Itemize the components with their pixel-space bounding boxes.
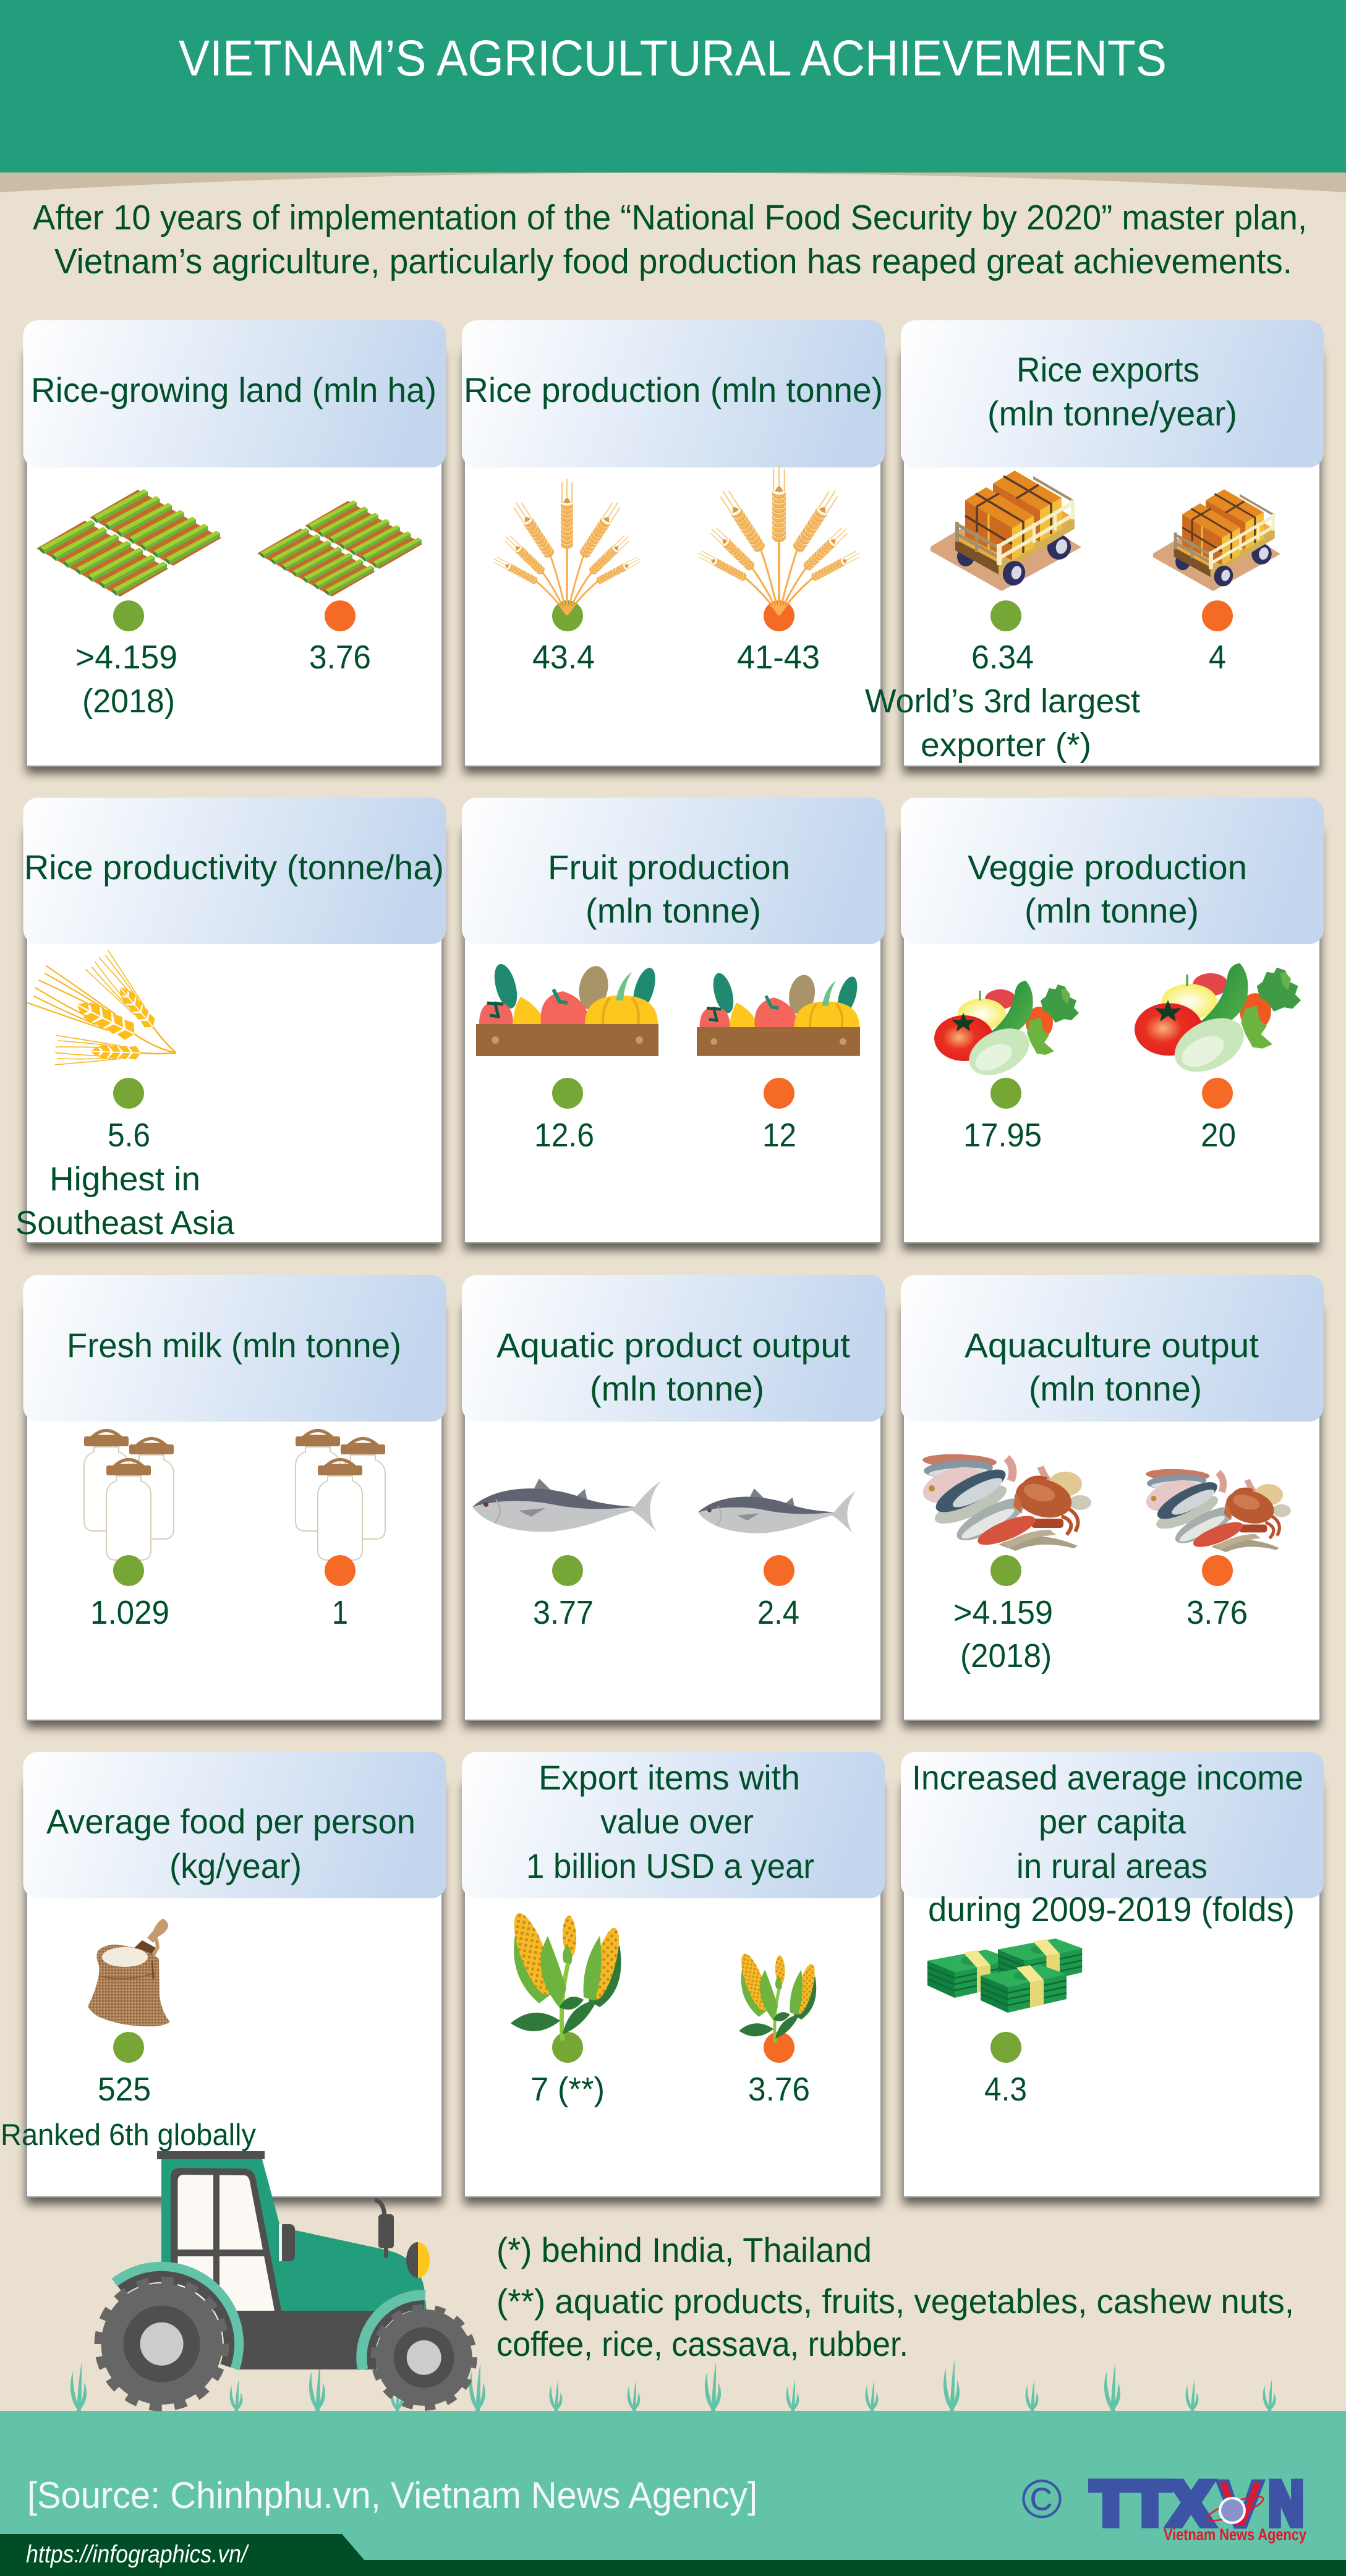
footnotes: (**) aquatic products, fruits, vegetables, cashew nuts, [496, 2282, 1294, 2321]
orange dot [764, 1555, 794, 1586]
logo: TTXVN: N [1269, 2469, 1303, 2538]
panel: aquaculture output [901, 1275, 1324, 1720]
card header [462, 798, 885, 944]
panel: fruit production [462, 798, 885, 1243]
card header [901, 1275, 1324, 1422]
icon: money stacks [927, 1938, 1082, 2013]
green dot [552, 1078, 583, 1109]
panel: rice productivity [15, 798, 446, 1243]
value [953, 1594, 1053, 1674]
value: 525 [98, 2071, 151, 2108]
panel: rice exports [865, 320, 1324, 766]
heading [987, 350, 1237, 433]
panel: rural income [901, 1752, 1324, 2197]
green dot [113, 1555, 144, 1586]
card body [903, 346, 1320, 766]
orange dot [325, 1555, 356, 1586]
value: 20 [1201, 1117, 1236, 1154]
heading: Aquaculture output [965, 1326, 1259, 1365]
value: >4.159 [75, 639, 177, 676]
card header [462, 320, 885, 467]
icon: golden rice [27, 950, 176, 1068]
note: Highest in [49, 1161, 200, 1198]
value: 12.6 [534, 1117, 594, 1154]
icon: rice bunch [492, 479, 642, 615]
orange dot [1202, 1555, 1233, 1586]
logo: TTXVN: V [1217, 2467, 1264, 2542]
heading [526, 1758, 814, 1885]
green dot [113, 1078, 144, 1109]
icon: large cargo cart [931, 471, 1081, 591]
heading [965, 1326, 1259, 1408]
card body [27, 346, 442, 766]
green dot [990, 1078, 1021, 1109]
card header [23, 1752, 446, 1898]
intro text [33, 198, 1307, 281]
note: Southeast Asia [15, 1205, 235, 1242]
intro text: After 10 years of implementation of the “National Food Security by 2020” master plan, [33, 198, 1307, 237]
value: 3.76 [309, 639, 371, 676]
icon: vegetables large [1135, 955, 1301, 1083]
note: Ranked 6th globally [1, 2118, 256, 2152]
value: 3.76 [748, 2071, 810, 2108]
green dot [552, 1555, 583, 1586]
heading: Export items with [539, 1758, 800, 1797]
card body [464, 824, 881, 1243]
card header [462, 1275, 885, 1422]
card body [27, 1301, 442, 1720]
green dot [990, 600, 1021, 631]
copyright symbol: © [1021, 2468, 1062, 2530]
orange dot [764, 2032, 794, 2063]
icon: vegetables small [934, 973, 1079, 1085]
heading: Increased average income [912, 1758, 1303, 1797]
footer band [0, 2411, 1346, 2576]
footnotes [496, 2230, 1294, 2363]
heading: Rice productivity (tonne/ha) [24, 848, 444, 887]
heading: Rice exports [1016, 350, 1199, 389]
heading [496, 1326, 850, 1408]
value: 4 [1209, 639, 1226, 676]
website url: https://infographics.vn/ [26, 2541, 249, 2568]
panel: export items [462, 1752, 885, 2197]
icon: large rice field [36, 489, 221, 597]
value: 43.4 [532, 639, 595, 676]
heading [912, 1758, 1303, 1929]
note [15, 1161, 235, 1242]
card body [903, 1301, 1320, 1720]
note: World’s 3rd largest [865, 683, 1140, 720]
value: 3.77 [533, 1594, 594, 1631]
green dot [113, 600, 144, 631]
card header [901, 320, 1324, 467]
icon: small cargo cart [1153, 489, 1280, 591]
orange dot [1202, 1078, 1233, 1109]
icon: tractor [98, 2151, 474, 2408]
card body [27, 1778, 442, 2197]
value: 1 [332, 1594, 348, 1631]
footnotes: (*) behind India, Thailand [496, 2230, 872, 2269]
icon: small tuna [698, 1488, 856, 1533]
card body [464, 1301, 881, 1720]
heading: Fresh milk (mln tonne) [67, 1326, 401, 1365]
icon: large fruit crate [476, 962, 660, 1056]
orange dot [764, 600, 794, 631]
logo: TTXVN [1091, 2467, 1306, 2544]
value: (2018) [960, 1637, 1052, 1674]
green dot [552, 2032, 583, 2063]
icon: seafood small [1143, 1468, 1291, 1552]
heading: (mln tonne) [586, 891, 761, 930]
heading: Rice production (mln tonne) [464, 370, 883, 409]
value: 6.34 [971, 639, 1034, 676]
heading: Average food per person [46, 1802, 415, 1841]
panel: aquatic product output [462, 1275, 885, 1720]
icon: rice sack [88, 1919, 170, 2026]
heading: (mln tonne) [1024, 891, 1199, 930]
intro text: Vietnam’s agriculture, particularly food production has reaped great achievements. [54, 242, 1292, 281]
note: exporter (*) [921, 727, 1091, 764]
heading: Rice-growing land (mln ha) [31, 370, 437, 409]
top band [0, 0, 1346, 192]
footnotes: coffee, rice, cassava, rubber. [496, 2324, 908, 2363]
orange dot [1202, 600, 1233, 631]
value: 17.95 [963, 1117, 1042, 1154]
value: >4.159 [953, 1594, 1053, 1631]
heading [548, 848, 790, 930]
heading: (mln tonne) [1029, 1369, 1202, 1408]
panel: average food per person [1, 1752, 446, 2197]
green dot [990, 2032, 1021, 2063]
heading: 1 billion USD a year [526, 1846, 814, 1885]
value: 2.4 [757, 1594, 799, 1631]
heading: during 2009-2019 (folds) [928, 1890, 1295, 1929]
value: 41-43 [737, 639, 820, 676]
card header [23, 1275, 446, 1422]
source line: [Source: Chinhphu.vn, Vietnam News Agency] [27, 2475, 757, 2516]
logo: TTXVN: TTX [1091, 2469, 1212, 2538]
icon: large tuna [472, 1478, 661, 1532]
heading [968, 848, 1247, 930]
card body [464, 1778, 881, 2197]
heading: Aquatic product output [496, 1326, 850, 1365]
green dot [113, 2032, 144, 2063]
heading: per capita [1039, 1802, 1186, 1841]
value [75, 639, 177, 720]
value: 5.6 [108, 1117, 150, 1154]
value: 7 (**) [530, 2071, 605, 2108]
value: 4.3 [984, 2071, 1027, 2108]
card header [901, 1752, 1324, 1898]
heading: in rural areas [1016, 1846, 1208, 1885]
panel: rice-growing land [23, 320, 446, 766]
card body [464, 346, 881, 766]
icon: small corn [736, 1951, 819, 2043]
heading: value over [600, 1802, 754, 1841]
heading: Veggie production [968, 848, 1247, 887]
orange dot [764, 1078, 794, 1109]
icon: seafood large [918, 1453, 1091, 1551]
card header [23, 798, 446, 944]
logo: TTXVN: Vietnam News Agency [1164, 2525, 1306, 2544]
icon: milk bottles [84, 1431, 174, 1560]
card body [903, 824, 1320, 1243]
value: (2018) [82, 683, 175, 720]
icon: larger rice bunch [696, 465, 862, 615]
green dot [990, 1555, 1021, 1586]
value: 3.76 [1186, 1594, 1248, 1631]
icon: small rice field [257, 500, 423, 597]
heading: Fruit production [548, 848, 790, 887]
orange dot [325, 600, 356, 631]
value: 1.029 [90, 1594, 169, 1631]
grass row [70, 2358, 1276, 2411]
heading [46, 1802, 415, 1885]
card header [23, 320, 446, 467]
card body [27, 824, 442, 1243]
icon: small fruit crate [697, 971, 861, 1056]
title: VIETNAM’S AGRICULTURAL ACHIEVEMENTS [179, 30, 1167, 87]
panel: veggie production [901, 798, 1324, 1243]
card header [901, 798, 1324, 944]
note [865, 683, 1140, 764]
heading: (mln tonne) [590, 1369, 764, 1408]
green dot [552, 600, 583, 631]
panel: fresh milk [23, 1275, 446, 1720]
icon: milk bottles [296, 1431, 385, 1560]
panel: rice production [462, 320, 885, 766]
card header [462, 1752, 885, 1898]
value: 12 [762, 1117, 796, 1154]
heading: (kg/year) [169, 1846, 302, 1885]
heading: (mln tonne/year) [987, 394, 1237, 433]
icon: large corn [506, 1909, 624, 2041]
card body [903, 1778, 1320, 2197]
